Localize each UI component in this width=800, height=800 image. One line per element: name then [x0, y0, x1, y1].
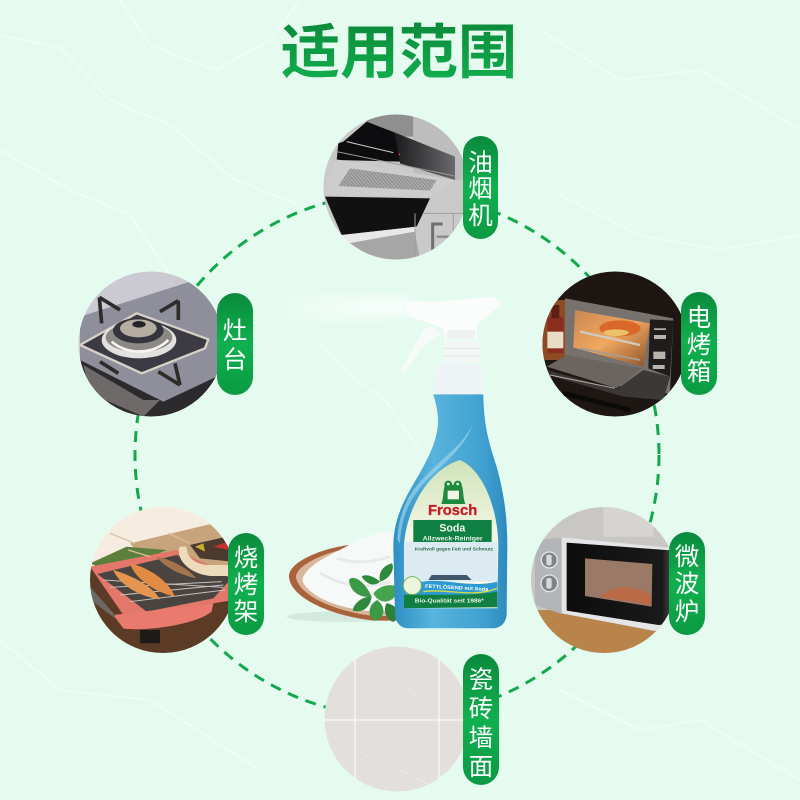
cap: [443, 342, 479, 362]
label pill: 瓷砖墙面: 砖: [469, 695, 493, 723]
photo: tile wall: [324, 646, 463, 792]
label pill: 灶台: 灶: [223, 317, 247, 345]
photo: gas stove: [77, 270, 220, 420]
dashed ring: [135, 193, 659, 717]
photo: barbecue grill: [90, 507, 228, 653]
label pill: 微波炉: 炉: [675, 598, 699, 626]
blue ribbon: [404, 581, 497, 595]
label pill: 瓷砖墙面: [463, 654, 499, 785]
frog logo: [441, 481, 465, 504]
label pill: 灶台: 台: [223, 346, 247, 374]
plate of soda powder: [287, 532, 413, 622]
photo: range hood: [324, 114, 463, 260]
panel: gas stove: [77, 270, 253, 420]
panel: microwave: [525, 503, 705, 657]
panel: barbecue grill: [90, 507, 264, 653]
green name band: [413, 520, 492, 542]
label pill: 烧烤架: 烤: [234, 571, 258, 599]
panel: electric oven: [540, 267, 717, 423]
trigger head: [406, 297, 502, 340]
panel: tile wall: [320, 645, 499, 795]
product group: [287, 297, 507, 628]
label pill: 电烤箱: 电: [687, 304, 711, 332]
title: 适用范围: [281, 20, 517, 86]
bottle body: [393, 394, 507, 628]
label pill: 微波炉: [669, 532, 705, 635]
label pill: 油烟机: [463, 136, 498, 239]
mint leaves: [349, 563, 399, 622]
neck: [434, 363, 483, 395]
spray bottle: [393, 297, 507, 628]
label pill: 烧烤架: 架: [234, 598, 258, 626]
label pill: 微波炉: 波: [675, 570, 699, 598]
trigger lever: [400, 325, 442, 373]
claim line: Kraftvoll gegen Fett und Schmutz: [415, 547, 493, 552]
label lower panel: [404, 542, 497, 582]
spray bottle: Bio-Qualität seit 1986*: [415, 599, 485, 605]
label pill: 油烟机: 机: [468, 202, 493, 230]
panel: range hood: [320, 110, 498, 260]
label pill: 瓷砖墙面: 瓷: [469, 666, 493, 694]
spray bottle: Allzweck-Reiniger: [423, 535, 483, 542]
label pill: 电烤箱: 箱: [687, 358, 711, 386]
label pill: 油烟机: 油: [468, 149, 493, 177]
photo: electric oven: [542, 272, 681, 416]
label pill: 灶台: [217, 293, 253, 395]
label pill: 油烟机: 烟: [468, 175, 493, 203]
label pill: 瓷砖墙面: 墙: [469, 724, 493, 752]
label pill: 烧烤架: [228, 533, 264, 635]
brand name: Frosch: [428, 503, 477, 519]
bottle label: [404, 460, 498, 608]
label pill: 电烤箱: [681, 292, 717, 395]
photo: microwave: [531, 507, 670, 653]
spray bottle: Soda: [439, 523, 466, 535]
spray bottle: FETTLÖSEND mit Soda: [425, 583, 489, 593]
label pill: 微波炉: 微: [675, 543, 699, 571]
label pill: 瓷砖墙面: 面: [469, 754, 493, 781]
label pill: 烧烤架: 烧: [234, 544, 258, 572]
lower green band: [404, 592, 497, 608]
spray beam: [270, 296, 408, 322]
label pill: 电烤箱: 烤: [687, 331, 711, 359]
soda badge: [403, 577, 421, 595]
